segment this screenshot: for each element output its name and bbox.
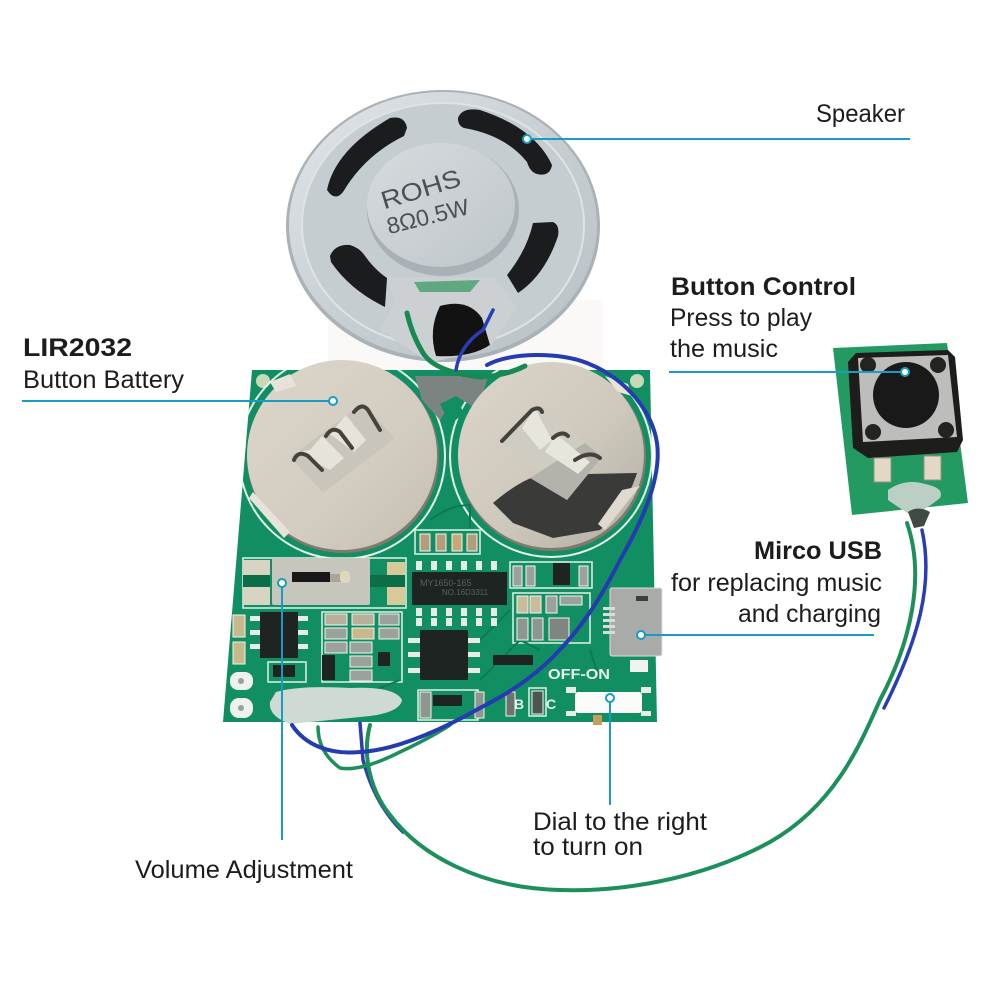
callout: dial switch (606, 694, 614, 805)
green loop lead (318, 725, 450, 769)
battery right (458, 362, 646, 551)
label: dial switch: to turn on (533, 833, 643, 861)
glue blob (270, 687, 402, 724)
speaker openings (327, 109, 558, 307)
speaker (286, 90, 600, 363)
blue signal wire (292, 355, 658, 753)
IC pins (250, 561, 497, 673)
label: button control: Press to play (670, 304, 812, 332)
infographic canvas (22, 90, 968, 892)
chip marking: MY1650-165 (420, 578, 472, 588)
button module (833, 343, 968, 528)
callout: button control (669, 368, 909, 376)
second blue lead from glue (360, 723, 403, 832)
dial switch (566, 687, 651, 725)
label: micro USB (671, 537, 882, 628)
green button wire (367, 523, 915, 890)
mounting holes (256, 374, 270, 388)
slide switch volume (243, 558, 405, 605)
callout: speaker (523, 135, 910, 143)
PCB silkscreen frames (243, 530, 592, 720)
wires (292, 310, 926, 890)
speaker wires (407, 313, 525, 377)
label: micro USB: Mirco USB (754, 537, 882, 565)
label: battery: LIR2032 (23, 334, 132, 362)
label: battery: Button Battery (23, 366, 184, 394)
label: button control: Button Control (671, 273, 856, 301)
PCB board: C (546, 696, 556, 712)
PCB board: NO.16D3311 (442, 588, 489, 597)
battery outline rings (239, 353, 652, 559)
micro USB connector (603, 588, 662, 672)
callout: micro USB (637, 631, 874, 639)
OFF-ON label: OFF-ON (548, 666, 610, 683)
label: speaker: Speaker (816, 100, 905, 128)
label: battery (23, 334, 184, 394)
callout: battery (22, 397, 337, 405)
speaker: 8Ω0.5W (384, 193, 472, 239)
battery tab left (290, 403, 395, 493)
label: volume: Volume Adjustment (135, 856, 353, 884)
B C labels: B (514, 696, 524, 712)
label: micro USB: for replacing music (671, 569, 882, 597)
blue button wire (884, 530, 926, 708)
speaker rating text: ROHS (378, 164, 464, 215)
small components (233, 534, 588, 718)
solder joint (415, 376, 488, 420)
traces (310, 505, 600, 700)
PCB board (223, 353, 662, 725)
label: micro USB: and charging (738, 600, 881, 628)
label: button control (670, 273, 856, 363)
terminal pads (230, 672, 253, 718)
paper backing behind speaker (328, 300, 603, 372)
callout: volume (278, 579, 286, 840)
label: button control: the music (670, 335, 778, 363)
integrated circuits (260, 563, 570, 706)
battery left (247, 360, 439, 553)
speaker hub (367, 144, 519, 276)
label: dial switch: Dial to the right (533, 808, 707, 836)
dark patch on battery (493, 473, 637, 538)
solder tab (380, 277, 517, 363)
label: dial switch (533, 808, 707, 861)
